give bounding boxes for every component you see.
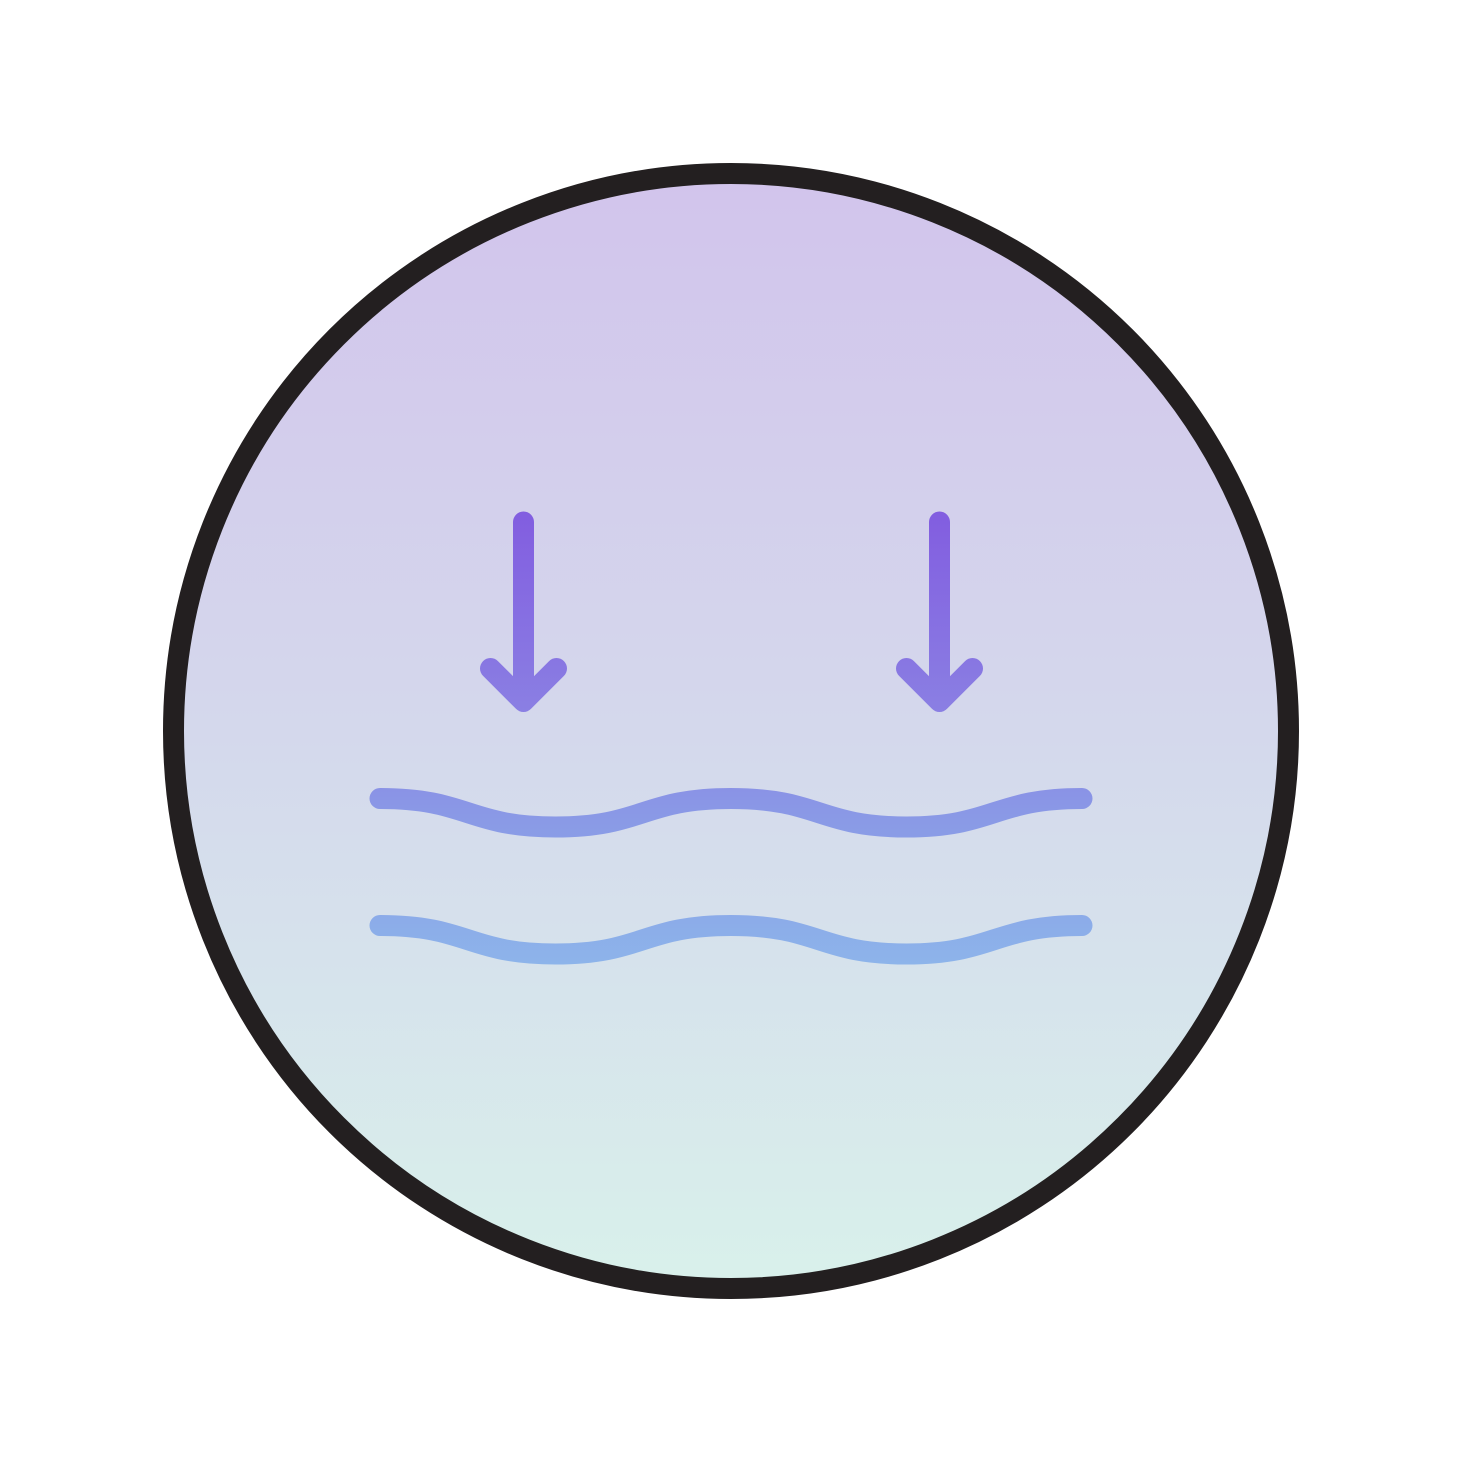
lower wave line bbox=[380, 926, 1082, 954]
right down arrow bbox=[906, 522, 972, 702]
upper wave line bbox=[380, 798, 1082, 827]
circle badge bbox=[174, 174, 1288, 1288]
left down arrow bbox=[490, 522, 556, 702]
